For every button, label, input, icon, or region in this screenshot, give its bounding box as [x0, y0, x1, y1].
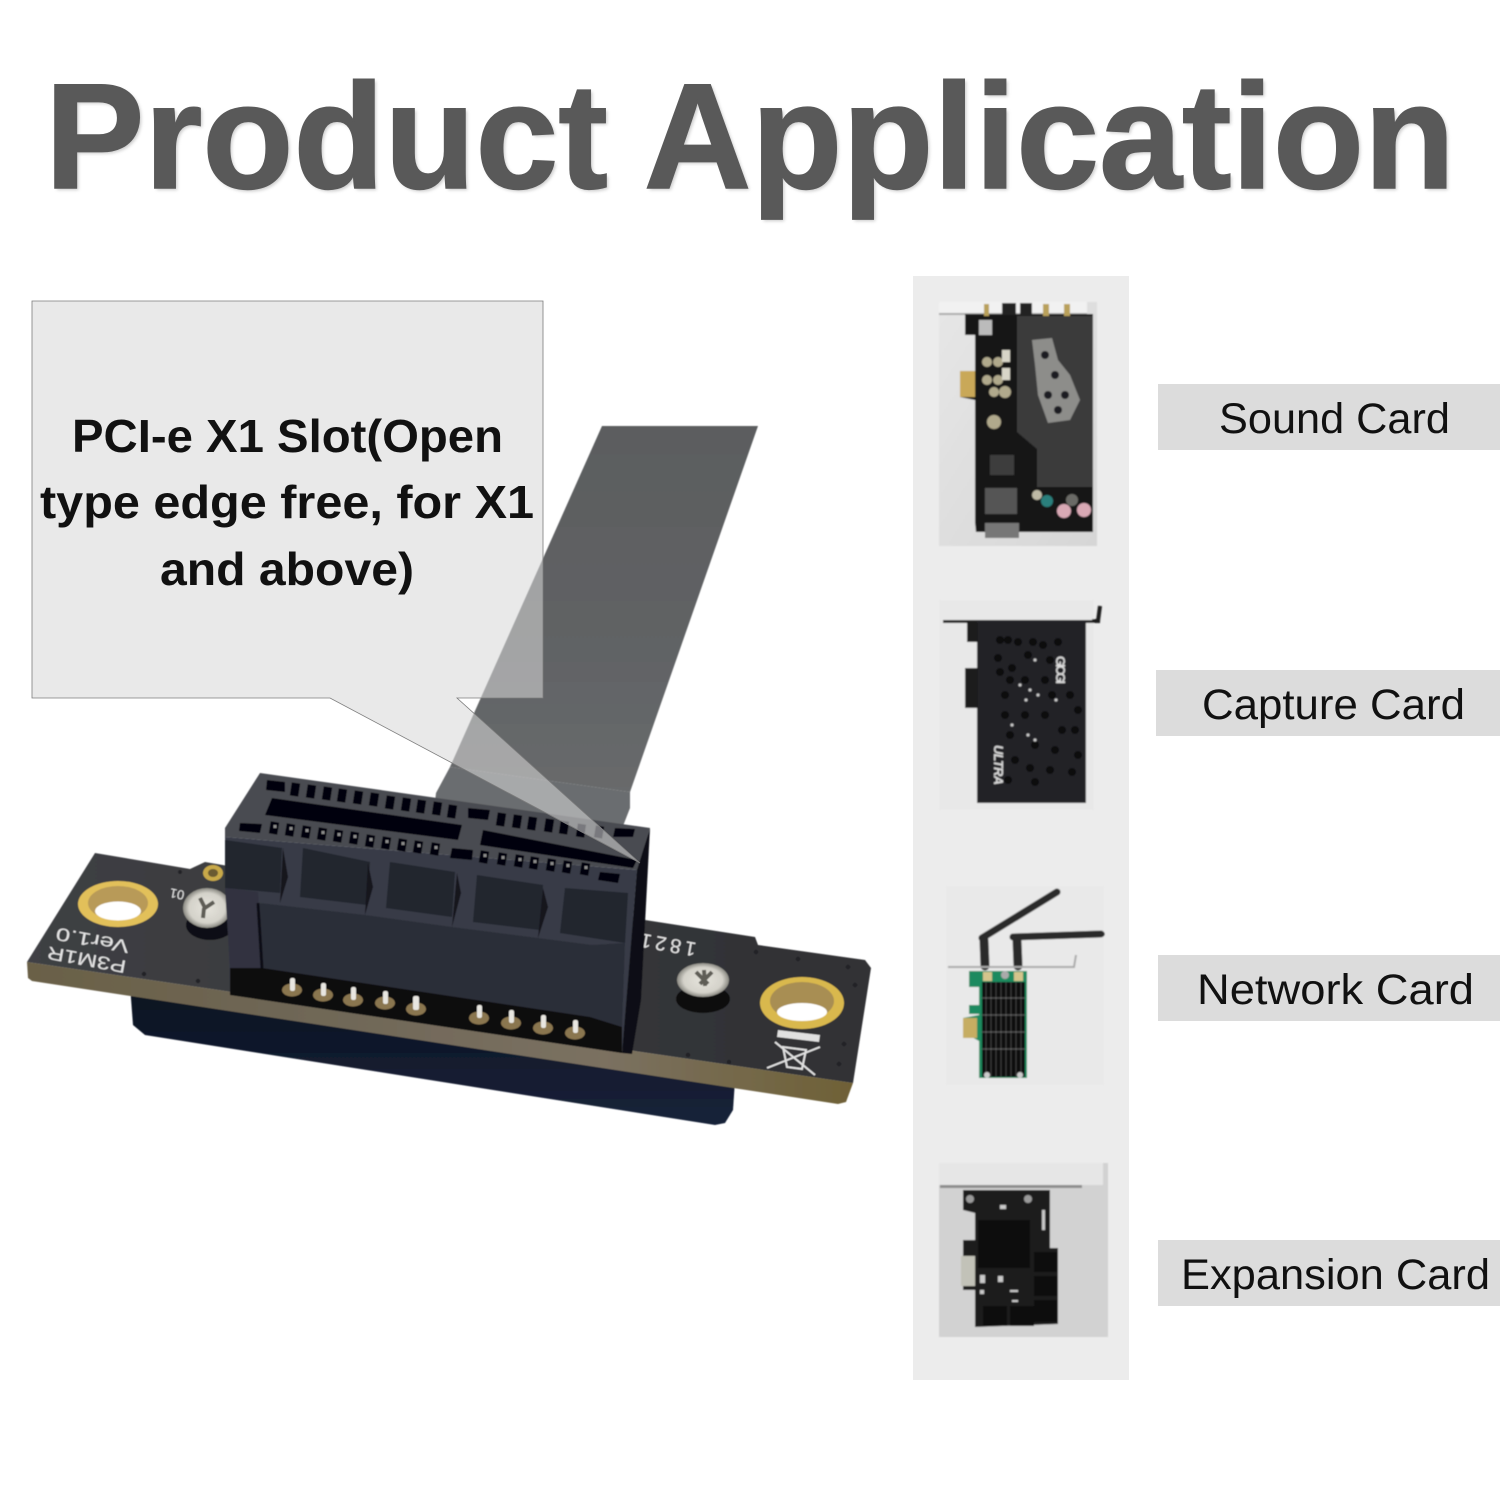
card image: capture card — [939, 600, 1100, 810]
silkscreen text: Ver1.0 — [54, 924, 131, 957]
connector front — [225, 837, 637, 1053]
lower face — [260, 903, 625, 1027]
panel: card column — [913, 276, 1129, 1380]
silkscreen text: 01 — [169, 885, 186, 903]
connector top — [225, 773, 650, 870]
label: Expansion Card: Expansion Card — [1181, 1251, 1490, 1299]
label: Sound Card — [1158, 384, 1500, 450]
silkscreen text — [45, 885, 698, 977]
callout text — [40, 410, 534, 595]
callout text: PCI-e X1 Slot(Open — [72, 410, 503, 462]
title: Product Application — [47, 54, 1457, 222]
product photo: PCI-e riser adapter — [27, 426, 871, 1125]
connector teeth — [273, 783, 600, 875]
card image: expansion card — [939, 1163, 1108, 1337]
label: Expansion Card — [1158, 1240, 1500, 1306]
solder pins — [282, 978, 585, 1040]
label: Capture Card: Capture Card — [1202, 681, 1465, 729]
small via — [203, 865, 223, 881]
front panels — [225, 840, 628, 943]
silkscreen text: 1821 — [639, 928, 698, 960]
callout box — [32, 301, 640, 863]
teeth highlights — [275, 825, 586, 869]
under-board connector block — [130, 985, 735, 1125]
silkscreen text: P3M1R — [45, 942, 128, 977]
mounting hole left — [78, 881, 158, 927]
label: Sound Card: Sound Card — [1219, 395, 1450, 443]
front notches — [280, 848, 548, 938]
flat ribbon cable — [435, 426, 758, 826]
connector right side — [622, 828, 650, 1054]
callout text: and above) — [160, 543, 414, 595]
label: Network Card: Network Card — [1197, 966, 1474, 1014]
circuit board — [27, 853, 871, 1104]
callout text: type edge free, for X1 — [40, 476, 534, 528]
label: Network Card — [1158, 955, 1500, 1021]
card image: capture card: ULTRA — [991, 745, 1006, 785]
card image: network card — [946, 886, 1104, 1085]
screw left — [183, 888, 234, 940]
mounting hole right — [760, 977, 844, 1029]
PCIe slot connector — [225, 773, 650, 1054]
icon: crossed-out bin — [767, 1030, 820, 1075]
card image: capture card: GICGI — [1053, 656, 1068, 684]
screw right — [676, 963, 730, 1013]
slots — [239, 780, 637, 883]
lower pin band — [230, 968, 622, 1053]
card image: sound card — [939, 302, 1097, 546]
label: Capture Card — [1156, 670, 1500, 736]
callout: PCI-e X1 Slot — [32, 301, 640, 863]
title: Product Application — [45, 52, 1455, 220]
